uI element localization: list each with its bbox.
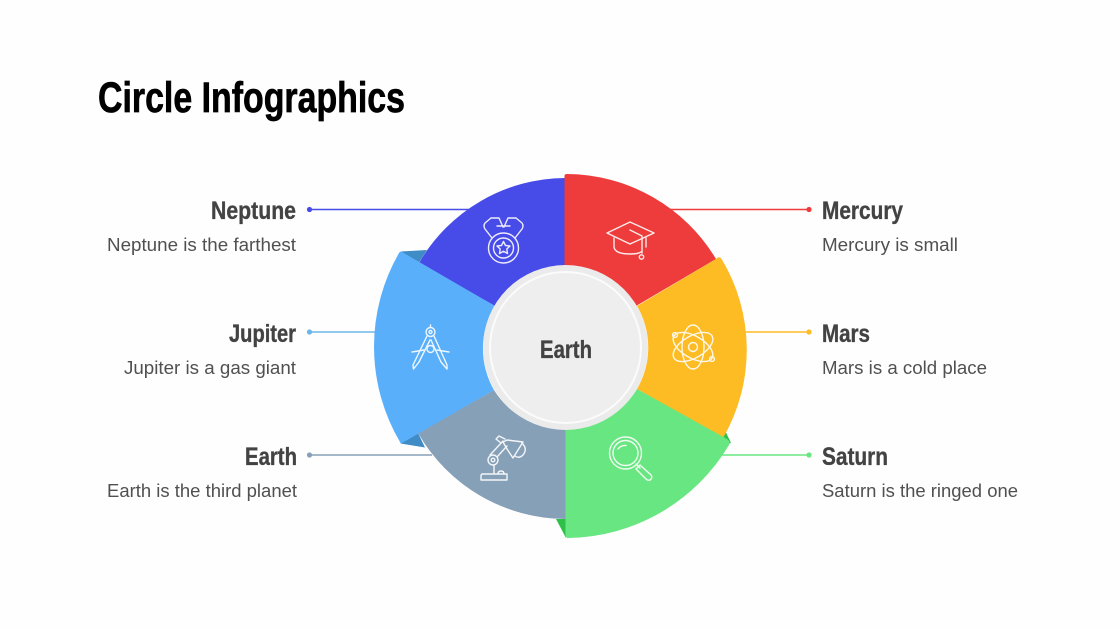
label: Mercury [822, 197, 958, 255]
connector: Neptune [307, 207, 470, 212]
segment: Earth [418, 390, 566, 519]
segment: Saturn [566, 389, 730, 538]
fold: Saturn right [722, 432, 731, 445]
label: Saturn [822, 443, 1018, 501]
segment: Mars [637, 257, 747, 438]
fold: Saturn bottom [556, 519, 566, 538]
connector: Earth [307, 452, 432, 458]
icon: atom [668, 325, 718, 369]
center circle [483, 265, 648, 430]
label: Mars: Mars is a cold place [822, 358, 987, 378]
segment: Mercury [564, 174, 716, 306]
label: Mercury: Mercury is small [822, 235, 958, 255]
fold: Jupiter top [400, 250, 427, 264]
icon: magnifying glass [610, 437, 652, 480]
icon: graduation cap [607, 222, 654, 259]
label: Neptune: Neptune is the farthest [107, 235, 296, 255]
label: Neptune [107, 197, 296, 255]
center circle: Earth [540, 336, 592, 364]
label: Saturn: Saturn is the ringed one [822, 481, 1018, 501]
label: Jupiter: Jupiter [229, 320, 296, 348]
label: Saturn: Saturn [822, 443, 888, 471]
label: Jupiter: Jupiter is a gas giant [124, 358, 296, 378]
label: Mars [822, 320, 987, 378]
icon: desk lamp [481, 436, 525, 480]
label: Jupiter [124, 320, 296, 378]
segment: Jupiter [374, 252, 495, 443]
connector: Mercury [670, 207, 812, 212]
label: Earth: Earth [245, 443, 297, 471]
label: Mars: Mars [822, 320, 870, 348]
connector: Saturn [722, 452, 812, 458]
fold: Jupiter bottom [400, 433, 425, 448]
label: Earth: Earth is the third planet [107, 481, 297, 501]
icon: compass [412, 325, 449, 369]
connector: Mars [744, 329, 812, 335]
segment: Neptune [419, 178, 566, 306]
title: Circle Infographics [98, 74, 405, 122]
label: Mercury: Mercury [822, 197, 903, 225]
label: Earth [107, 443, 297, 501]
icon: medal [484, 218, 523, 263]
label: Neptune: Neptune [211, 197, 296, 225]
connector: Jupiter [307, 329, 376, 335]
